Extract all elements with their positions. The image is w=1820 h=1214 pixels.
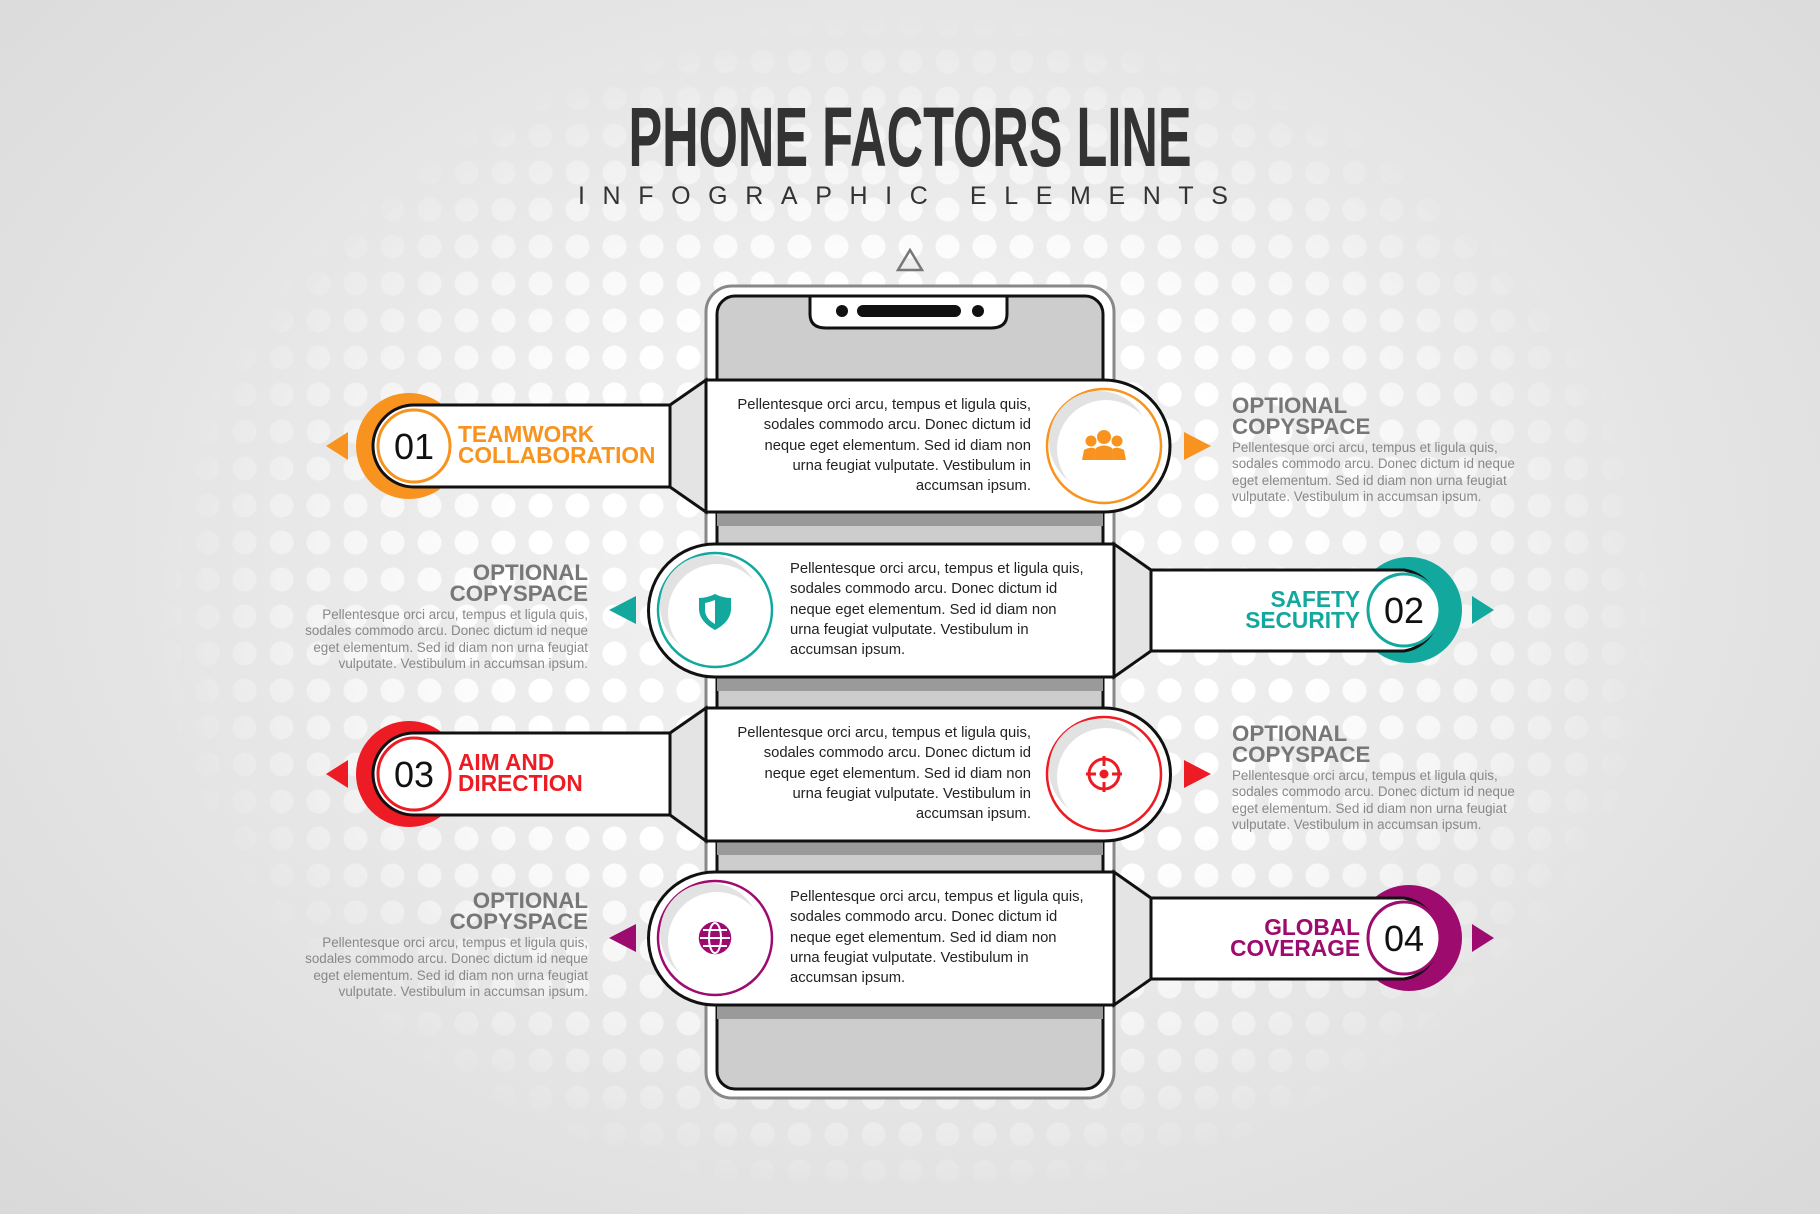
copyspace 3: eget elementum. Sed id diam non urna feugiat xyxy=(1232,801,1507,816)
icon: shield xyxy=(699,594,731,630)
row 2: safety: accumsan ipsum. xyxy=(790,642,905,658)
copyspace 2 xyxy=(305,560,588,671)
row 3: aim: DIRECTION xyxy=(458,770,583,796)
row 4: global: COVERAGE xyxy=(1230,935,1360,961)
row 4: global: neque eget elementum. Sed id diam non xyxy=(790,930,1057,946)
copyspace 2: vulputate. Vestibulum in accumsan ipsum. xyxy=(339,656,588,671)
row 1: teamwork: Pellentesque orci arcu, tempus et ligula quis, xyxy=(737,397,1031,413)
row 2: safety: Pellentesque orci arcu, tempus et ligula quis, xyxy=(790,561,1084,577)
row 1: teamwork: 01 xyxy=(394,426,434,467)
copyspace 1: vulputate. Vestibulum in accumsan ipsum. xyxy=(1232,489,1481,504)
row 2: safety: SECURITY xyxy=(1245,607,1360,633)
row 1: teamwork xyxy=(326,380,1211,526)
copyspace 2: OPTIONAL xyxy=(473,560,588,585)
copyspace 4: sodales commodo arcu. Donec dictum id neque xyxy=(305,951,588,966)
copyspace 3: vulputate. Vestibulum in accumsan ipsum. xyxy=(1232,817,1481,832)
row 3: aim: sodales commodo arcu. Donec dictum id xyxy=(764,745,1031,761)
copyspace 4 xyxy=(305,888,588,999)
copyspace 3: Pellentesque orci arcu, tempus et ligula quis, xyxy=(1232,768,1498,783)
copyspace 4: COPYSPACE xyxy=(450,909,588,934)
copyspace 3: sodales commodo arcu. Donec dictum id neque xyxy=(1232,784,1515,799)
row 2: safety: 02 xyxy=(1384,590,1424,631)
copyspace 1: Pellentesque orci arcu, tempus et ligula quis, xyxy=(1232,440,1498,455)
row 1: teamwork: accumsan ipsum. xyxy=(916,478,1031,494)
row 4: global xyxy=(609,872,1494,1019)
row 1: teamwork: urna feugiat vulputate. Vestibulum in xyxy=(792,458,1031,474)
icon: globe xyxy=(700,923,730,953)
copyspace 4: OPTIONAL xyxy=(473,888,588,913)
row 1: teamwork: TEAMWORK xyxy=(458,421,595,447)
row 3: aim: 03 xyxy=(394,754,434,795)
row 1: teamwork: neque eget elementum. Sed id diam non xyxy=(764,438,1031,454)
row 2: safety: SAFETY xyxy=(1270,586,1360,612)
subtitle: INFOGRAPHIC ELEMENTS xyxy=(578,182,1228,210)
row 3: aim: urna feugiat vulputate. Vestibulum in xyxy=(792,786,1031,802)
row 3: aim: accumsan ipsum. xyxy=(916,806,1031,822)
copyspace 3: COPYSPACE xyxy=(1232,742,1370,767)
row 4: global: accumsan ipsum. xyxy=(790,970,905,986)
row 4: global: sodales commodo arcu. Donec dictum id xyxy=(790,909,1057,925)
copyspace 4: eget elementum. Sed id diam non urna feugiat xyxy=(313,968,588,983)
copyspace 2: Pellentesque orci arcu, tempus et ligula quis, xyxy=(322,607,588,622)
copyspace 4: Pellentesque orci arcu, tempus et ligula quis, xyxy=(322,935,588,950)
row 3: aim: Pellentesque orci arcu, tempus et ligula quis, xyxy=(737,725,1031,741)
row 3: aim: neque eget elementum. Sed id diam non xyxy=(764,766,1031,782)
row 1: teamwork: sodales commodo arcu. Donec dictum id xyxy=(764,417,1031,433)
icon: team xyxy=(1082,430,1126,460)
title: PHONE FACTORS LINE xyxy=(628,90,1192,184)
row 4: global: GLOBAL xyxy=(1264,914,1360,940)
copyspace 1: sodales commodo arcu. Donec dictum id neque xyxy=(1232,456,1515,471)
copyspace 3: OPTIONAL xyxy=(1232,721,1347,746)
row 1: teamwork: COLLABORATION xyxy=(458,442,655,468)
copyspace 2: sodales commodo arcu. Donec dictum id neque xyxy=(305,623,588,638)
phone xyxy=(706,286,1114,1098)
row 3: aim xyxy=(326,708,1211,855)
row 3: aim: AIM AND xyxy=(458,749,554,775)
icon: target xyxy=(1086,756,1122,792)
copyspace 1: OPTIONAL xyxy=(1232,393,1347,418)
row 4: global: Pellentesque orci arcu, tempus et ligula quis, xyxy=(790,889,1084,905)
copyspace 1: eget elementum. Sed id diam non urna feugiat xyxy=(1232,473,1507,488)
row 4: global: urna feugiat vulputate. Vestibulum in xyxy=(790,950,1029,966)
icon: top triangle xyxy=(898,250,922,270)
copyspace 4: vulputate. Vestibulum in accumsan ipsum. xyxy=(339,984,588,999)
phone notch xyxy=(810,296,1007,328)
copyspace 1: COPYSPACE xyxy=(1232,414,1370,439)
copyspace 2: COPYSPACE xyxy=(450,581,588,606)
copyspace 3 xyxy=(1232,721,1515,832)
copyspace 1 xyxy=(1232,393,1515,504)
row 4: global: 04 xyxy=(1384,918,1424,959)
row 2: safety: neque eget elementum. Sed id diam non xyxy=(790,602,1057,618)
row 2: safety xyxy=(609,544,1494,691)
row 2: safety: sodales commodo arcu. Donec dictum id xyxy=(790,581,1057,597)
row 2: safety: urna feugiat vulputate. Vestibulum in xyxy=(790,622,1029,638)
copyspace 2: eget elementum. Sed id diam non urna feugiat xyxy=(313,640,588,655)
